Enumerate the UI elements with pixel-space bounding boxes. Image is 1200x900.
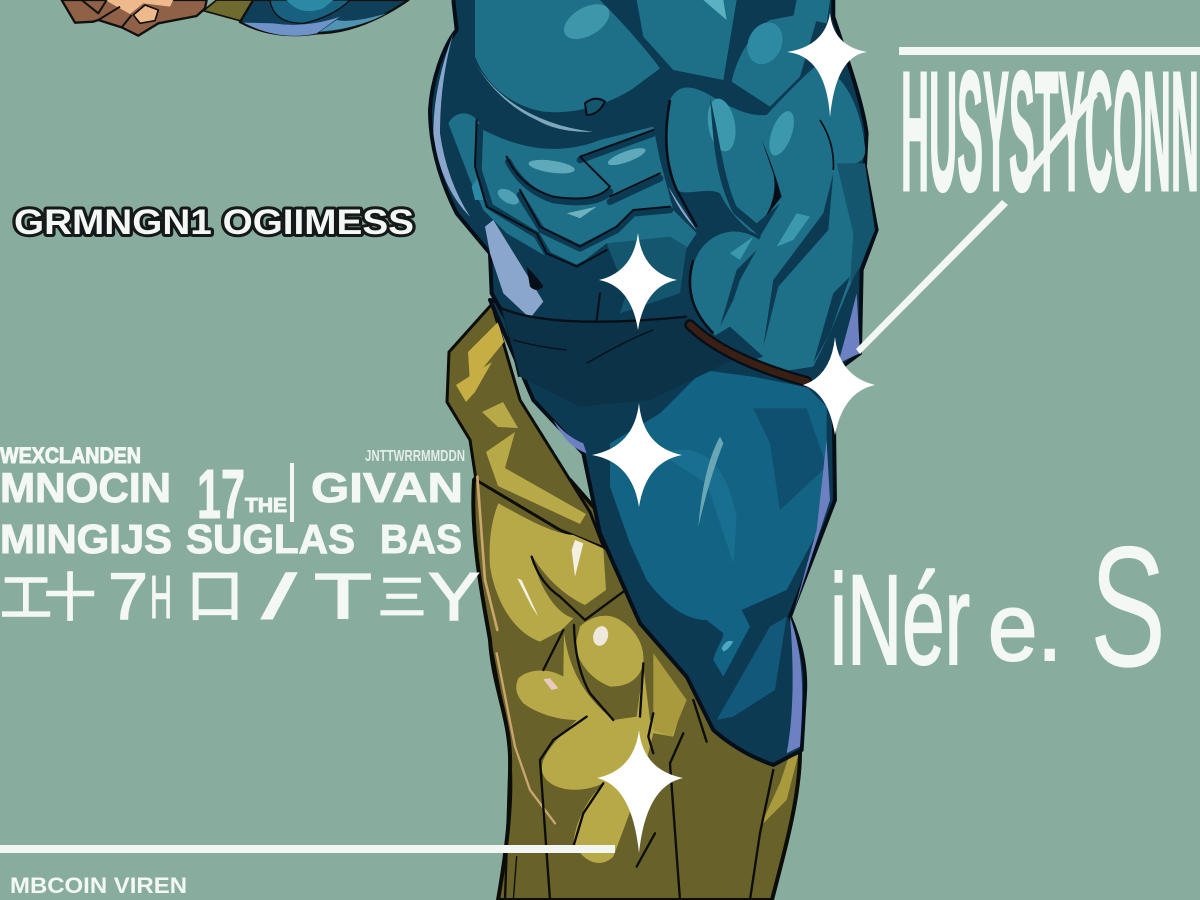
wrist band	[690, 325, 807, 382]
text block: left stats: BAS	[380, 516, 462, 562]
text block: glyph row: 十	[44, 570, 96, 628]
muscle highlights	[490, 503, 798, 863]
thigh light area	[610, 370, 827, 677]
text block: glyph row	[0, 559, 480, 635]
text block: left stats: SUGLAS	[186, 516, 355, 562]
biceps	[666, 65, 865, 238]
icon: fist and raised arm	[62, 0, 408, 36]
text block: glyph row: /	[262, 563, 298, 632]
text block: glyph row: 7	[108, 559, 148, 633]
text block: left stats: MNOCIN	[0, 464, 171, 511]
text block: glyph row: 口	[186, 564, 244, 629]
text block: left stats: WEXCLANDEN	[0, 443, 141, 468]
tan edge and line work	[477, 477, 773, 900]
panel: torso and arm	[430, 0, 877, 417]
leg base	[473, 440, 800, 900]
text block: glyph row: 三	[378, 572, 426, 625]
panel: yellow leg	[447, 304, 800, 900]
text block: left stats: THE	[245, 495, 287, 517]
panel: blue thigh and hip	[490, 300, 835, 765]
thigh silhouette	[490, 300, 835, 765]
text block: glyph row: H	[150, 564, 172, 631]
shoulder	[637, 0, 737, 80]
forearm	[690, 157, 857, 372]
text block: glyph row: Y	[428, 559, 480, 635]
lavender edges	[433, 33, 470, 217]
text block: glyph row: 工	[0, 570, 52, 628]
lavender edge	[787, 617, 802, 753]
label: outlined subtitle: GRMNGN1 OGIIMESS	[14, 203, 414, 242]
label: bottom caption: MBCOIN VIREN	[10, 873, 187, 898]
text block: left stats: 17	[197, 455, 245, 533]
text block: script signature: e.	[988, 574, 1062, 681]
forearm shadows	[713, 173, 850, 363]
text block: script signature: iNér	[830, 549, 970, 692]
text block: left stats: JNTTWRRMMDDN	[365, 448, 465, 465]
text block: glyph row: T	[314, 560, 372, 632]
text block: script signature	[830, 511, 1166, 703]
torso outline	[430, 0, 877, 377]
right arm strip	[837, 163, 875, 283]
abdominal muscles	[448, 113, 697, 267]
abdominal shadows	[478, 127, 670, 268]
abdominal lines	[475, 120, 670, 320]
arm line work	[666, 100, 713, 333]
text block: left stats: MINGIJS	[0, 516, 172, 562]
text block: left stats	[0, 443, 465, 562]
icon: sparkles	[592, 13, 875, 853]
pectoral	[475, 0, 660, 112]
belt sash	[447, 304, 604, 548]
text block: left stats: GIVAN	[311, 464, 463, 511]
torso silhouette	[430, 0, 877, 417]
trunks waistband	[502, 308, 740, 407]
